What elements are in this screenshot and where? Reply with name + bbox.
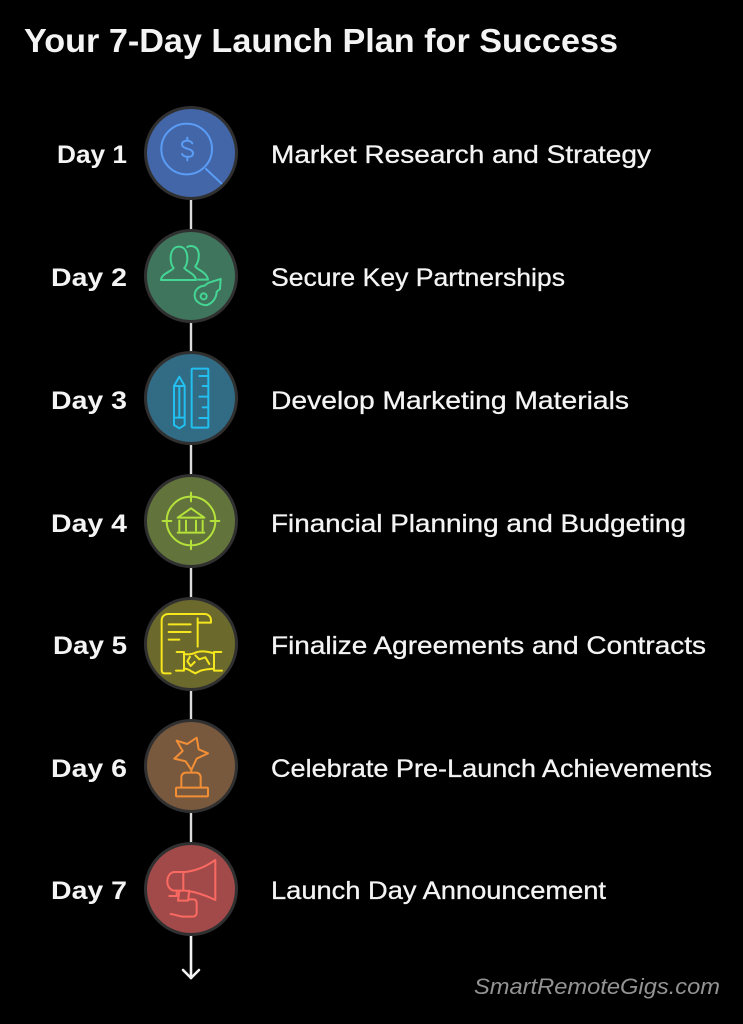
step: day 5 — [53, 598, 706, 690]
circle: day 6 — [146, 720, 236, 812]
icon: people and key — [161, 246, 221, 305]
step: day 4 — [51, 476, 686, 566]
title: Your 7-Day Launch Plan for Success — [24, 22, 618, 59]
circle: day 5 — [146, 598, 236, 690]
step: day 5: Day 5 — [53, 632, 127, 660]
step: day 7: Day 7 — [51, 877, 127, 905]
icon: megaphone — [167, 860, 215, 917]
step: day 2: Secure Key Partnerships — [271, 264, 565, 292]
step: day 6 — [51, 720, 712, 812]
step: day 3 — [51, 352, 629, 444]
circle: day 7 — [146, 844, 236, 934]
arrow: timeline end — [183, 936, 199, 978]
icon: magnifier with dollar — [161, 124, 221, 183]
step: day 3: Day 3 — [51, 387, 127, 415]
step: day 6: Celebrate Pre-Launch Achievements — [271, 755, 712, 783]
step: day 7: Launch Day Announcement — [271, 877, 606, 905]
step: day 1 — [57, 108, 652, 198]
step: day 1: Market Research and Strategy — [271, 141, 652, 169]
circle: day 2 — [146, 230, 236, 322]
icon: pencil and ruler — [174, 369, 208, 428]
step: day 5: Finalize Agreements and Contracts — [271, 632, 706, 660]
step: day 3: Develop Marketing Materials — [271, 387, 629, 415]
icon: bank in target — [163, 493, 219, 549]
circle: day 3 — [146, 352, 236, 444]
step: day 2: Day 2 — [51, 264, 127, 292]
watermark: SmartRemoteGigs.com — [474, 974, 720, 999]
step: day 6: Day 6 — [51, 755, 127, 783]
timeline connector lines — [190, 200, 192, 842]
step: day 7 — [51, 844, 606, 934]
circle: day 4 — [146, 476, 236, 566]
icon: star trophy — [174, 738, 208, 796]
circle: day 1 — [146, 108, 236, 198]
step: day 1: Day 1 — [57, 141, 127, 169]
icon: contract and handshake — [162, 614, 222, 673]
step: day 4: Financial Planning and Budgeting — [271, 510, 686, 538]
step: day 2 — [51, 230, 565, 322]
step: day 4: Day 4 — [51, 510, 127, 538]
